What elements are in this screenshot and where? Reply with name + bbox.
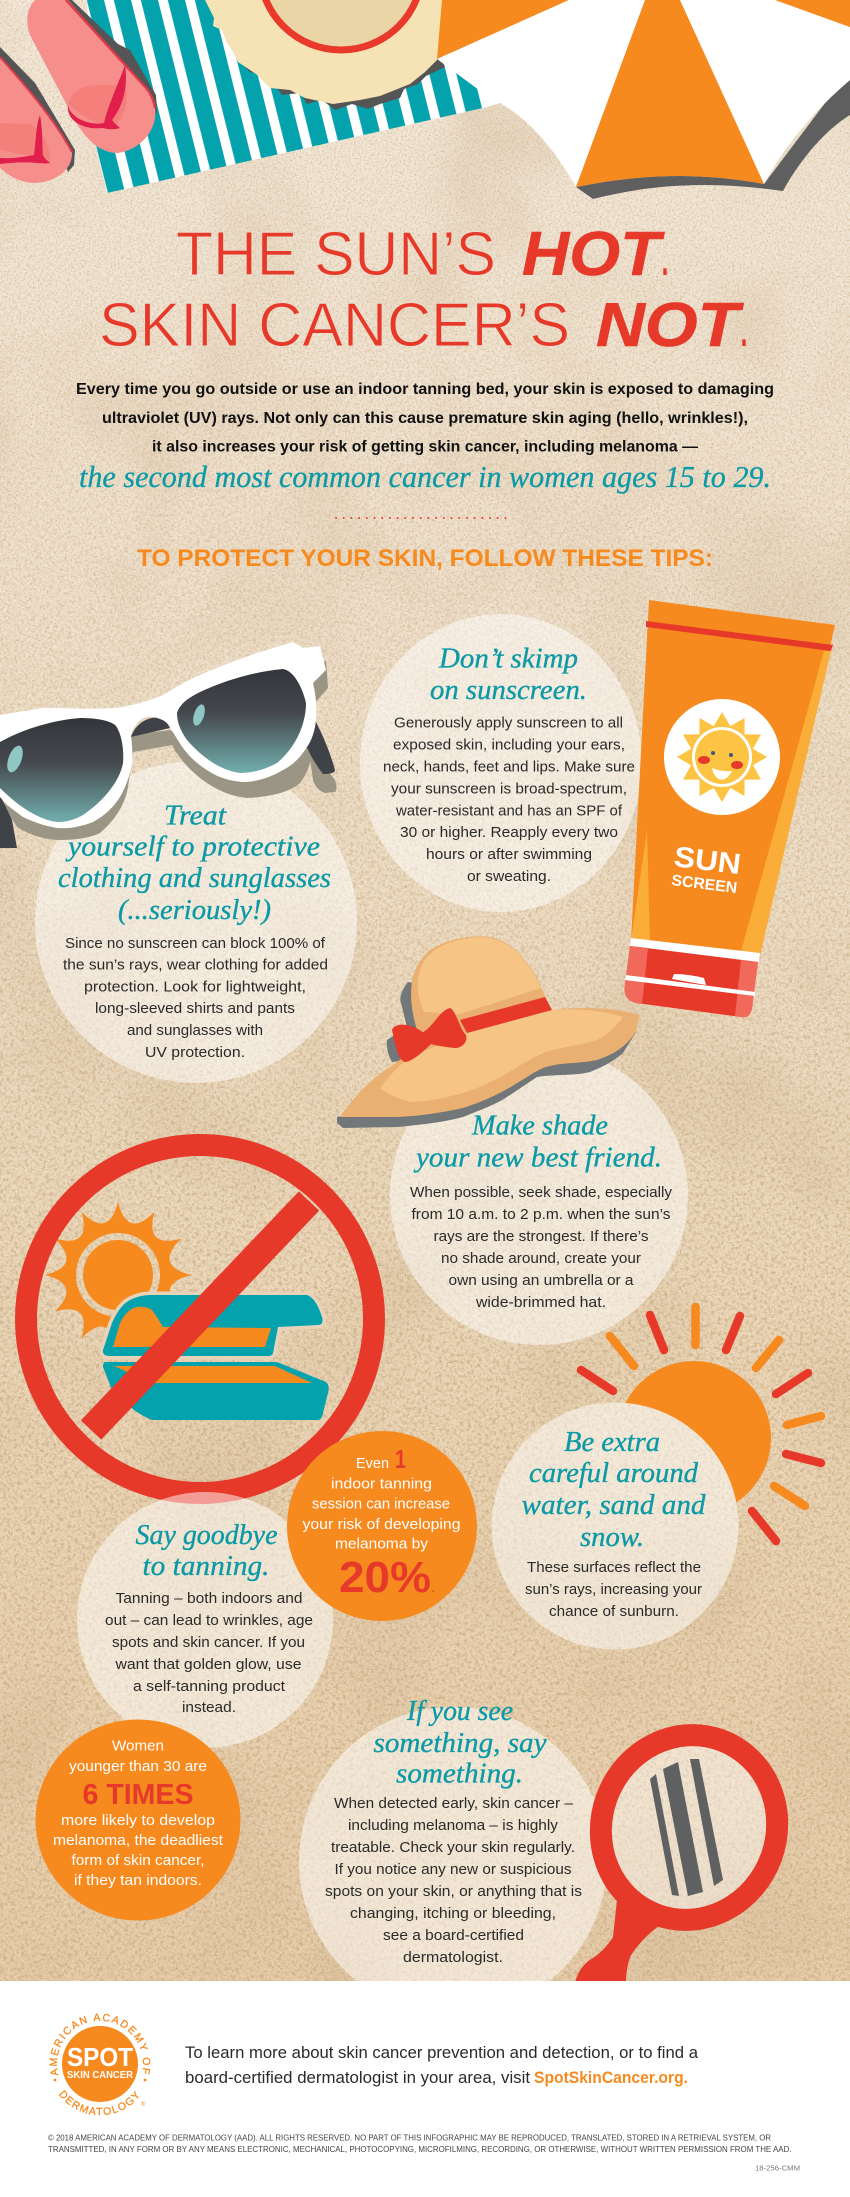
tube lettering: [671, 841, 743, 897]
callout: six times: melanoma, the deadliest: [53, 1832, 224, 1849]
callout: one session 20 percent: .: [431, 1579, 435, 1596]
callout: one session 20 percent: [287, 1431, 477, 1621]
panel: goodbye to tanning tip: want that golden glow, use: [114, 1656, 302, 1673]
intro paragraph: [76, 381, 774, 456]
panel: goodbye to tanning tip: instead.: [182, 1699, 236, 1716]
logo: SPOT Skin Cancer: SKIN CANCER: [67, 2069, 133, 2081]
callout: one session 20 percent: your risk of developing: [302, 1516, 460, 1533]
logo: SPOT Skin Cancer: SPOT: [67, 2042, 133, 2072]
beach towel: [87, 0, 487, 193]
panel: see something say something tip: If you notice any new or suspicious: [334, 1861, 572, 1878]
footer call to action: board-certified dermatologist in your area, visit: [185, 2069, 530, 2087]
panel: sunscreen tip: hours or after swimming: [426, 846, 592, 863]
panel: sunscreen tip: Don’t skimp: [438, 644, 578, 674]
title: .: [660, 220, 670, 289]
title: NOT: [596, 291, 745, 360]
panel: sunscreen tip: on sunscreen.: [430, 675, 587, 706]
document code: 18-256-CMM: [755, 2164, 800, 2172]
callout: one session 20 percent: Even: [356, 1455, 389, 1472]
panel: sunscreen tip: 30 or higher. Reapply every two: [400, 824, 618, 841]
callout: six times: Women: [112, 1738, 164, 1754]
footer call to action: SpotSkinCancer.org.: [534, 2069, 688, 2087]
footer band: [0, 1981, 850, 2197]
panel: sunscreen tip: [360, 614, 642, 912]
panel: water sand snow tip: [492, 1402, 738, 1650]
title: .: [739, 291, 749, 360]
copyright: [48, 2134, 792, 2154]
make shade text: own using an umbrella or a: [448, 1272, 634, 1289]
panel: see something say something tip: see a board-certified: [383, 1927, 524, 1944]
sun label on tube: [664, 699, 780, 815]
panel: see something say something tip: If you see: [406, 1696, 513, 1727]
panel: sunscreen tip: exposed skin, including your ears,: [393, 736, 625, 754]
logo: SPOT Skin Cancer: ®: [141, 2101, 146, 2108]
panel: water sand snow tip: careful around: [529, 1458, 699, 1489]
icon: sun with rays: [581, 1307, 821, 1541]
callout: one session 20 percent: session can increase: [312, 1496, 450, 1512]
logo: SPOT Skin Cancer: AMERICAN ACADEMY OF: [49, 2013, 150, 2076]
copyright: © 2018 AMERICAN ACADEMY OF DERMATOLOGY (AAD). ALL RIGHTS RESERVED. NO PART OF THIS INFOGRAPHIC MAY BE REPRODUCED, TRANSLATED, STORED IN A RETRIEVAL SYSTEM, OR: [48, 2134, 771, 2142]
callout: six times: more likely to develop: [61, 1812, 215, 1829]
icon: hand mirror: [575, 1710, 803, 1982]
title: SKIN CANCER’S: [99, 291, 570, 360]
callout: six times: 6 TIMES: [82, 1779, 194, 1811]
dotted divider: [336, 517, 513, 519]
title: THE SUN’S: [176, 220, 496, 289]
tube lettering: SCREEN: [671, 872, 738, 897]
flip flops: [0, 0, 157, 183]
panel: goodbye to tanning tip: a self-tanning product: [133, 1678, 286, 1695]
panel: goodbye to tanning tip: spots and skin cancer. If you: [112, 1634, 305, 1651]
panel: shade tip: [390, 1047, 688, 1345]
intro paragraph: it also increases your risk of getting skin cancer, including melanoma —: [152, 438, 699, 456]
panel: goodbye to tanning tip: to tanning.: [142, 1551, 270, 1582]
temple arms: [0, 795, 17, 848]
panel: sunscreen tip: water-resistant and has an SPF of: [395, 802, 623, 820]
panel: water sand snow tip: snow.: [580, 1522, 644, 1553]
panel: see something say something tip: When detected early, skin cancer –: [334, 1795, 574, 1812]
panel: clothing and sunglasses: and sunglasses with: [127, 1022, 263, 1039]
callout: one session 20 percent: indoor tanning: [331, 1476, 432, 1492]
footer call to action: To learn more about skin cancer prevention and detection, or to find a: [185, 2044, 699, 2062]
panel: water sand snow tip: water, sand and: [522, 1490, 707, 1521]
panel: sunscreen tip: your sunscreen is broad-spectrum,: [391, 780, 627, 798]
make shade text: your new best friend.: [413, 1142, 662, 1174]
panel: see something say something tip: changing, itching or bleeding,: [350, 1905, 556, 1922]
intro paragraph: Every time you go outside or use an indoor tanning bed, your skin is exposed to damaging: [76, 381, 774, 398]
callout: one session 20 percent: 1: [395, 1444, 406, 1474]
icon: sunscreen tube: [624, 600, 835, 1017]
panel: see something say something tip: [299, 1696, 607, 1981]
make shade text: no shade around, create your: [441, 1250, 641, 1267]
make shade text: from 10 a.m. to 2 p.m. when the sun’s: [412, 1206, 670, 1223]
panel: water sand snow tip: sun’s rays, increasing your: [525, 1581, 702, 1598]
callout: one session 20 percent: melanoma by: [335, 1536, 429, 1552]
panel: sunscreen tip: neck, hands, feet and lips. Make sure: [383, 758, 635, 776]
hat brim: [340, 1008, 640, 1117]
panel: clothing and sunglasses: protection. Look for lightweight,: [84, 978, 306, 996]
panel: see something say something tip: including melanoma – is highly: [348, 1817, 559, 1834]
tube lettering: SUN: [672, 841, 743, 881]
icon: no tanning bed sign: [26, 1145, 374, 1493]
title: [99, 220, 749, 360]
panel: goodbye to tanning tip: out – can lead to wrinkles, age: [105, 1612, 313, 1629]
panel: clothing and sunglasses: the sun’s rays, wear clothing for added: [63, 956, 328, 974]
sun in sign: [45, 1202, 191, 1348]
title: HOT: [522, 220, 665, 289]
panel: clothing and sunglasses: (...seriously!): [118, 895, 271, 926]
teal statistic line: the second most common cancer in women ages 15 to 29.: [79, 459, 771, 494]
panel: goodbye to tanning tip: Tanning – both indoors and: [116, 1590, 302, 1607]
panel: sunscreen tip: or sweating.: [467, 868, 551, 885]
callout: one session 20 percent: 20%: [339, 1553, 431, 1602]
panel: clothing and sunglasses: [35, 761, 357, 1083]
make shade text: rays are the strongest. If there’s: [434, 1228, 648, 1245]
intro paragraph: ultraviolet (UV) rays. Not only can this cause premature skin aging (hello, wrinkles!),: [102, 410, 748, 427]
panel: see something say something tip: spots on your skin, or anything that is: [325, 1883, 582, 1900]
panel: clothing and sunglasses: Since no sunscreen can block 100% of: [65, 935, 326, 952]
logo: SPOT Skin Cancer: DERMATOLOGY: [58, 2090, 139, 2116]
panel: goodbye to tanning tip: [77, 1492, 333, 1748]
hat crown: [411, 936, 552, 1036]
hat bow: [392, 1008, 466, 1062]
lenses: [177, 669, 306, 773]
make shade text: When possible, seek shade, especially: [410, 1184, 672, 1201]
make shade text: [410, 1110, 672, 1311]
callout: six times: if they tan indoors.: [74, 1872, 202, 1889]
panel: goodbye to tanning tip: Say goodbye: [136, 1520, 278, 1551]
tanning bed: [103, 1295, 329, 1420]
section heading: TO PROTECT YOUR SKIN, FOLLOW THESE TIPS:: [137, 545, 713, 572]
panel: water sand snow tip: Be extra: [564, 1427, 660, 1458]
icon: wide-brimmed hat: [337, 936, 640, 1128]
panel: see something say something tip: dermatologist.: [403, 1949, 503, 1966]
callout: six times: younger than 30 are: [69, 1758, 207, 1775]
icon: sunglasses: [0, 642, 336, 848]
panel: clothing and sunglasses: Treat: [164, 800, 227, 832]
panel: clothing and sunglasses: clothing and sunglasses: [58, 863, 331, 894]
beach umbrella: [437, 0, 850, 199]
callout: six times: form of skin cancer,: [72, 1852, 204, 1869]
panel: clothing and sunglasses: long-sleeved shirts and pants: [95, 1000, 295, 1017]
make shade text: Make shade: [471, 1110, 608, 1142]
panel: see something say something tip: treatable. Check your skin regularly.: [331, 1839, 575, 1856]
glasses shadow: [0, 660, 328, 840]
footer call to action: [185, 2044, 699, 2087]
panel: see something say something tip: something.: [396, 1758, 523, 1790]
make shade text: wide-brimmed hat.: [475, 1294, 606, 1311]
panel: water sand snow tip: chance of sunburn.: [549, 1603, 679, 1620]
panel: see something say something tip: something, say: [374, 1728, 547, 1759]
panel: clothing and sunglasses: UV protection.: [145, 1044, 245, 1061]
straw hat: [205, 0, 445, 110]
copyright: TRANSMITTED, IN ANY FORM OR BY ANY MEANS ELECTRONIC, MECHANICAL, PHOTOCOPYING, MICROFILMING, RECORDING, OR OTHERWISE, WITHOUT WRITTEN PERMISSION FROM THE AAD.: [48, 2145, 792, 2154]
callout: six times: [36, 1720, 240, 1920]
panel: water sand snow tip: These surfaces reflect the: [527, 1559, 701, 1576]
logo: SPOT Skin Cancer: [49, 2013, 150, 2116]
white frame: [0, 642, 326, 828]
panel: sunscreen tip: Generously apply sunscreen to all: [394, 714, 623, 732]
panel: clothing and sunglasses: yourself to protective: [65, 832, 320, 862]
